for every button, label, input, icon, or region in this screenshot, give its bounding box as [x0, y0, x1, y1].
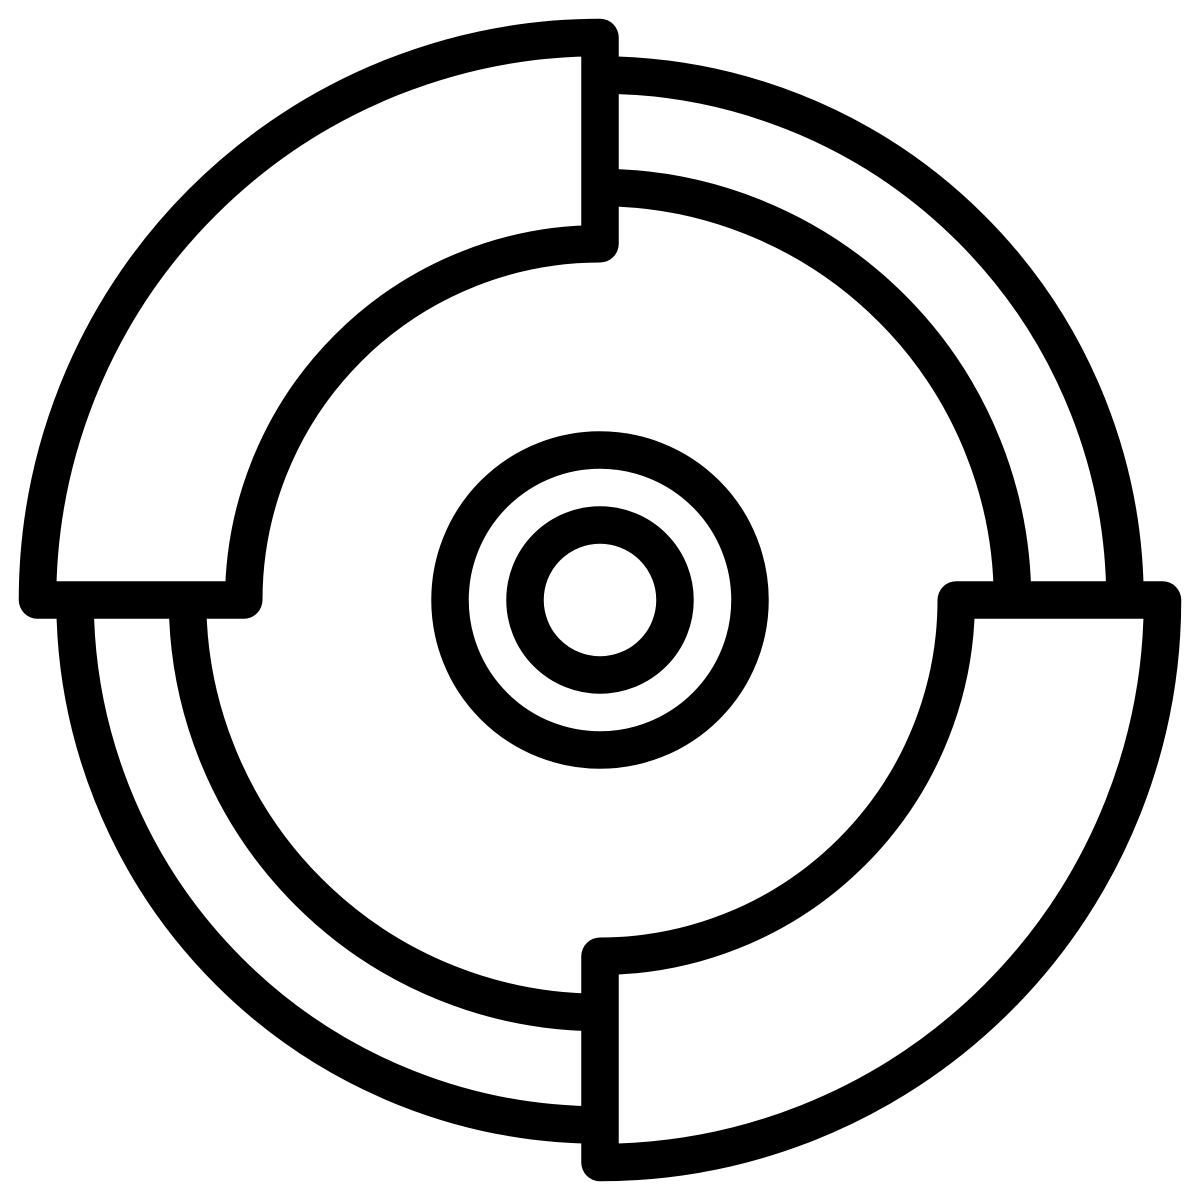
bottom-left thin segment [75, 600, 600, 1125]
top-right thin segment [600, 75, 1125, 600]
bottom-right thick segment [600, 600, 1162, 1162]
top-left thick segment [38, 38, 600, 600]
outer center ring [450, 450, 750, 750]
inner center ring [525, 525, 675, 675]
